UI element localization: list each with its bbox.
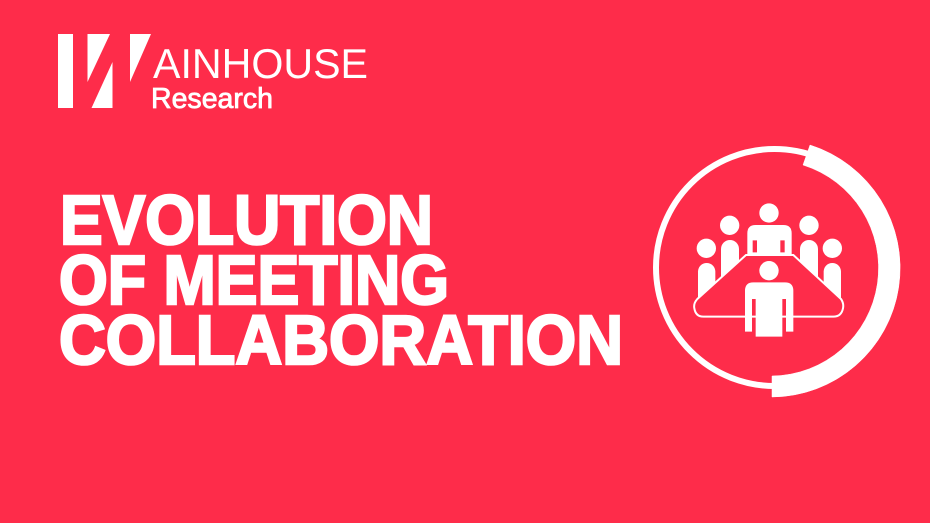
back row heads: [697, 203, 842, 258]
icon: people around meeting table: [694, 203, 843, 337]
table: [694, 255, 843, 317]
icon: meeting ring: [656, 145, 900, 397]
logo mark: stylised W: [58, 34, 151, 108]
logo wordmark: AINHOUSE: AINHOUSE: [153, 40, 368, 87]
thick arc: [772, 145, 900, 397]
title line 1: EVOLUTION: [60, 181, 433, 259]
logo wordmark: Research: Research: [151, 83, 273, 115]
back row bodies: [698, 225, 841, 302]
front person: [745, 261, 793, 337]
title line 2: OF MEETING: [59, 241, 449, 319]
title: [59, 181, 623, 379]
title line 3: COLLABORATION: [59, 301, 623, 379]
logo: Wainhouse Research: [58, 34, 368, 115]
thin ring: [656, 149, 893, 386]
